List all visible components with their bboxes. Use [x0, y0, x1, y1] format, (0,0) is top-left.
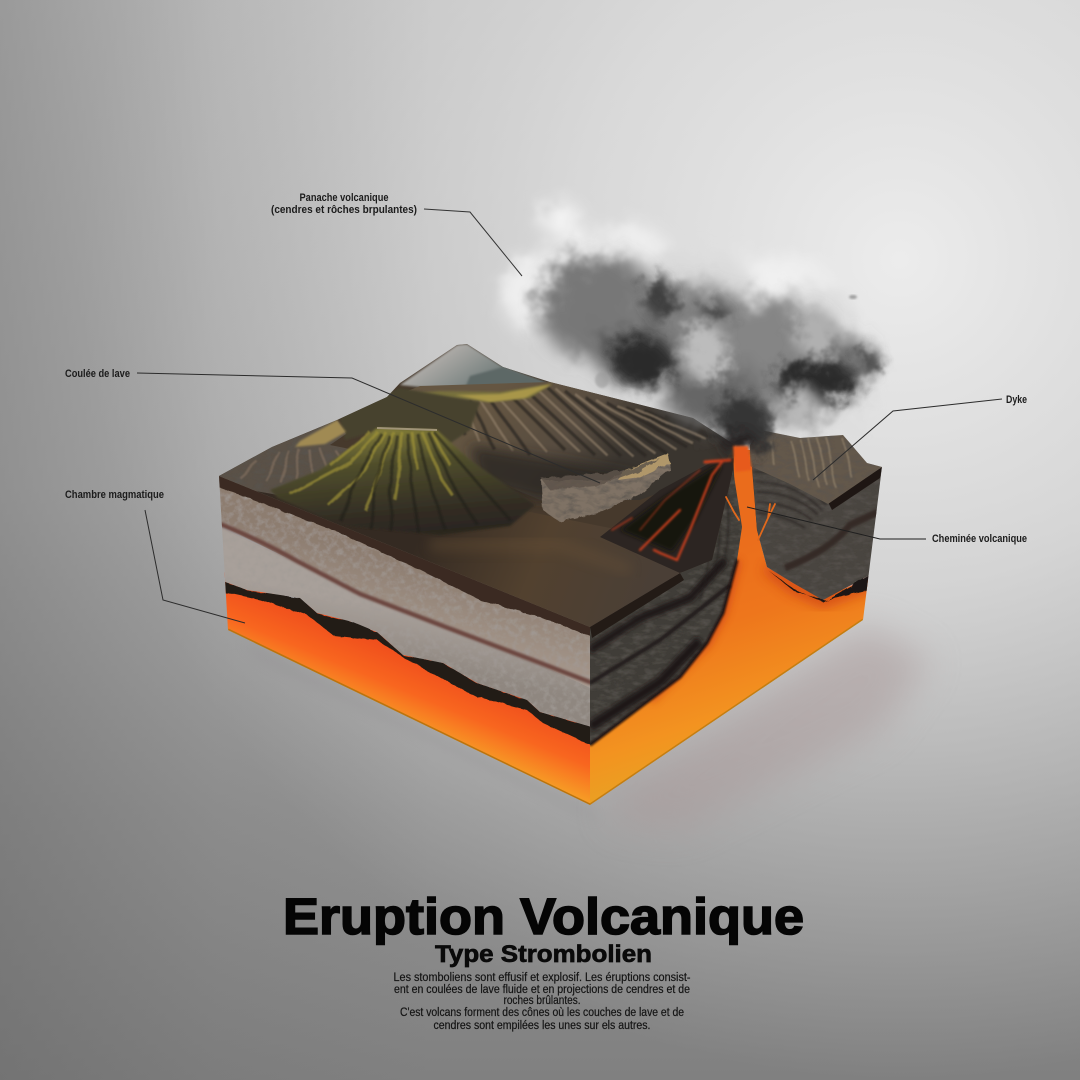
rear rock — [752, 462, 882, 600]
far peak — [400, 344, 544, 388]
callout: chambre magmatique — [65, 489, 245, 623]
right face — [590, 440, 882, 805]
callout: cheminée volcanique: Cheminée volcanique — [932, 533, 1027, 545]
dark cone flank — [600, 458, 735, 573]
callout: dyke: Dyke — [1006, 394, 1027, 406]
caldera rim — [426, 384, 550, 403]
front rock — [590, 470, 742, 745]
ground shadow — [240, 625, 930, 830]
left face: strata — [215, 474, 600, 810]
callout: panache volcanique: Panache volcanique — [300, 192, 388, 204]
description text — [394, 972, 691, 1032]
title: Eruption Volcanique — [283, 888, 804, 945]
description text: Les stomboliens sont effusif et explosif. Les éruptions consist- — [394, 972, 691, 984]
small right mountain — [541, 453, 670, 522]
callout: coulée de lave: Coulée de lave — [65, 368, 130, 380]
lower caldera shade — [470, 445, 640, 500]
lava veins — [612, 460, 730, 560]
caldera ridges — [385, 382, 735, 500]
front soil corner — [590, 573, 684, 638]
left ridge — [219, 420, 348, 494]
dark crust — [215, 578, 595, 747]
lava glow near rock — [767, 567, 875, 601]
subtitle: Type Strombolien — [435, 941, 652, 968]
lava vent — [733, 446, 752, 472]
top surface — [219, 344, 735, 627]
magma chamber left — [219, 570, 600, 810]
callout: dyke — [813, 394, 1027, 480]
description text: cendres sont empilées les unes sur els autres. — [434, 1020, 650, 1032]
left back slope — [340, 390, 480, 442]
callout: panache volcanique: (cendres et rôches brpulantes) — [271, 204, 417, 216]
description text: roches brûlantes. — [504, 995, 580, 1007]
smoke plume — [501, 203, 881, 455]
callout: chambre magmatique: Chambre magmatique — [65, 489, 164, 501]
right mountain — [750, 430, 882, 504]
callout: coulée de lave — [65, 368, 600, 483]
callout: panache volcanique — [271, 192, 522, 276]
description text: ent en coulées de lave fluide et en projections de cendres et de — [394, 984, 690, 996]
upper rock — [215, 474, 595, 690]
callout: cheminée volcanique — [747, 507, 1027, 545]
brown soil — [215, 474, 595, 638]
central cone — [270, 428, 535, 535]
magma & chimney — [590, 443, 880, 805]
main plain — [250, 490, 700, 630]
volcanic block — [200, 330, 882, 810]
description text: C'est volcans forment des cônes où les couches de lave et de — [400, 1007, 684, 1019]
red-brown band — [220, 524, 595, 684]
lower rock — [215, 525, 595, 728]
dykes — [726, 497, 775, 540]
